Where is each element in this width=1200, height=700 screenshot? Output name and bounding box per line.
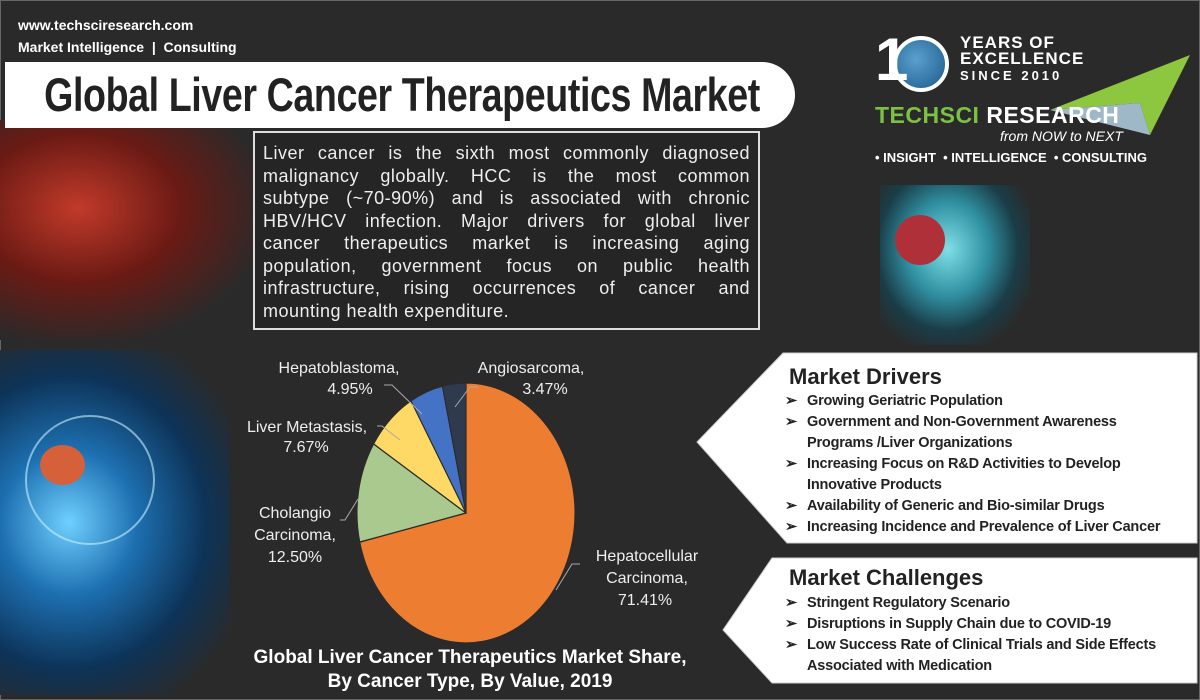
pie chart: 12.50% — [268, 549, 322, 566]
text block: intro: mounting health expenditure. — [263, 300, 509, 320]
title: Global Liver Cancer Therapeutics Market — [44, 68, 760, 121]
logo: SINCE 2010 — [960, 68, 1062, 83]
image: liver top-left — [0, 120, 260, 340]
panel: market drivers: Growing Geriatric Population — [807, 393, 1003, 409]
pie chart: Angiosarcoma, — [478, 360, 584, 377]
panel: market drivers: Increasing Focus on R&D Activities to Develop — [807, 456, 1121, 472]
website header: www.techsciresearch.com — [18, 17, 193, 33]
panel: market challenges: Market Challenges — [789, 565, 983, 590]
panel: market drivers: Programs /Liver Organizations — [807, 435, 1012, 451]
pie chart: Carcinoma, — [254, 527, 336, 544]
chart caption: By Cancer Type, By Value, 2019 — [328, 671, 612, 692]
logo: TECHSCI RESEARCH — [875, 102, 1119, 128]
panel: market challenges: Stringent Regulatory Scenario — [807, 595, 1010, 611]
text block: intro: malignancy globally. HCC is the most common — [263, 166, 750, 186]
chart caption: Global Liver Cancer Therapeutics Market Share, — [254, 647, 686, 668]
pie chart: 71.41% — [618, 592, 672, 609]
text block: intro: HBV/HCV infection. Major drivers for global liver — [263, 210, 750, 230]
pie chart — [247, 360, 699, 642]
website header: Market Intelligence | Consulting — [18, 39, 237, 55]
text block: intro: infrastructure, rising occurrences of cancer and — [263, 278, 750, 298]
text block: intro: subtype (~70-90%) and is associated with chronic — [263, 188, 750, 208]
logo: EXCELLENCE — [960, 49, 1084, 68]
text block: intro — [253, 131, 760, 330]
icon: green arrow — [1050, 55, 1190, 135]
panel: market drivers: Government and Non-Government Awareness — [807, 414, 1117, 430]
image: liver top-right — [880, 185, 1030, 345]
pie chart: Liver Metastasis, — [247, 419, 367, 436]
panel: market drivers: Market Drivers — [789, 364, 942, 389]
image: body scan bottom-left — [0, 350, 230, 695]
text block: intro: Liver cancer is the sixth most commonly diagnosed — [263, 143, 750, 163]
pie chart: Hepatocellular — [596, 548, 699, 565]
pie chart: Hepatoblastoma, — [279, 360, 399, 377]
pie chart: 4.95% — [327, 381, 373, 398]
logo — [875, 26, 1190, 165]
logo: from NOW to NEXT — [1000, 128, 1123, 144]
logo: YEARS OF — [960, 33, 1055, 52]
panel: market drivers — [696, 352, 1198, 544]
panel: market drivers: Availability of Generic and Bio-similar Drugs — [807, 498, 1104, 514]
panel: market drivers: Innovative Products — [807, 477, 942, 493]
text block: intro: population, government focus on public health — [263, 256, 750, 276]
text block: intro: cancer therapeutics market is increasing aging — [263, 233, 750, 253]
pie chart: Cholangio — [259, 505, 331, 522]
chart caption — [254, 647, 686, 692]
logo: 1 — [875, 26, 908, 93]
icon: globe — [893, 36, 949, 92]
panel: market challenges — [722, 558, 1198, 684]
pie chart: Carcinoma, — [606, 570, 688, 587]
panel: market challenges: Associated with Medication — [807, 658, 992, 674]
pie chart: 7.67% — [283, 439, 329, 456]
website header — [18, 17, 237, 55]
panel: market challenges: Disruptions in Supply Chain due to COVID-19 — [807, 616, 1111, 632]
pie chart: 3.47% — [522, 381, 568, 398]
panel: market drivers: Increasing Incidence and Prevalence of Liver Cancer — [807, 519, 1160, 535]
logo: • INSIGHT • INTELLIGENCE • CONSULTING — [875, 150, 1147, 165]
panel: market challenges: Low Success Rate of Clinical Trials and Side Effects — [807, 637, 1156, 653]
